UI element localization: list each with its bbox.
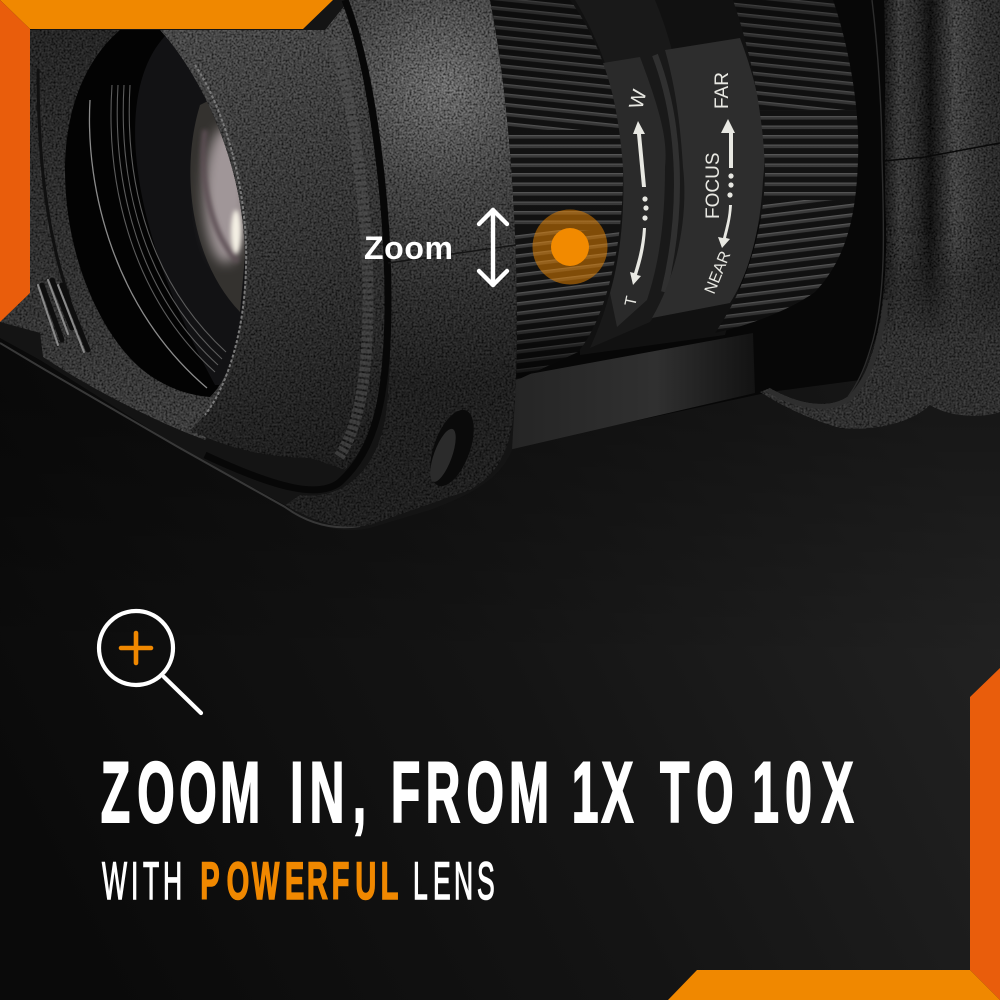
- title: IN,: [290, 744, 366, 841]
- body lower shading: [760, 0, 1000, 429]
- zoom scale patch: [603, 57, 666, 327]
- zoom ring markings: W: [626, 87, 651, 111]
- focus ring markings: [702, 72, 735, 296]
- hood inner wall: [160, 5, 385, 470]
- rear shadow behind lens barrel: [480, 0, 890, 450]
- title: 1X: [572, 744, 634, 841]
- side vent slot: [421, 404, 483, 492]
- focus scale patch: [652, 38, 764, 318]
- subtitle: LENS: [413, 851, 495, 911]
- zoom callout label: Zoom: [364, 230, 453, 266]
- title: [101, 744, 854, 841]
- front plate: [0, 30, 250, 440]
- hood edge highlight: [195, 65, 246, 415]
- hood wall lit band: [335, 40, 368, 458]
- lens opening: [65, 30, 245, 397]
- icon: double-headed arrow: [479, 210, 507, 285]
- corner accent: right red-orange bar: [970, 668, 1000, 1000]
- camera body right side: [760, 0, 1000, 429]
- lens silhouette and lower rim: [0, 0, 517, 530]
- subtitle: WITH: [102, 851, 182, 911]
- corner accent: bottom orange bar: [668, 970, 1000, 1000]
- title: ZOOM: [101, 744, 260, 841]
- inner rim line: [848, 0, 883, 397]
- body seam: [884, 143, 1000, 161]
- icon: magnifier with plus: [99, 611, 201, 713]
- cavity rim band: [768, 300, 886, 406]
- focus ring markings: FAR: [712, 72, 733, 109]
- support base strip: [500, 333, 755, 452]
- title: FROM: [391, 744, 549, 841]
- title: 10X: [752, 744, 854, 841]
- subtitle: [102, 851, 495, 912]
- title: TO: [660, 744, 734, 841]
- zoom ring markings: [622, 87, 651, 308]
- knurled focus ring: [718, 0, 858, 329]
- hotspot marker: [532, 210, 608, 284]
- camera lens photo: [0, 0, 1000, 530]
- focus ring markings: FOCUS: [703, 152, 724, 219]
- hood seam: [388, 245, 516, 263]
- black gasket ring: [205, 0, 388, 490]
- outer hood shell: [285, 0, 517, 527]
- subtitle: POWERFUL: [200, 852, 398, 912]
- groove rim: [655, 55, 677, 292]
- front plate ridges: [38, 70, 88, 352]
- focus ring markings: NEAR: [702, 249, 734, 296]
- zoom ring markings: T: [622, 295, 641, 308]
- lower rim highlight: [0, 343, 360, 527]
- corner accent: left red-orange bar: [0, 0, 30, 322]
- lens barrel rings and glass: [89, 36, 260, 388]
- zoom ring band: [575, 0, 688, 348]
- smooth barrel section: [560, 0, 775, 355]
- knurled zoom ring: [490, 0, 623, 380]
- corner accent: top orange bar: [0, 0, 333, 29]
